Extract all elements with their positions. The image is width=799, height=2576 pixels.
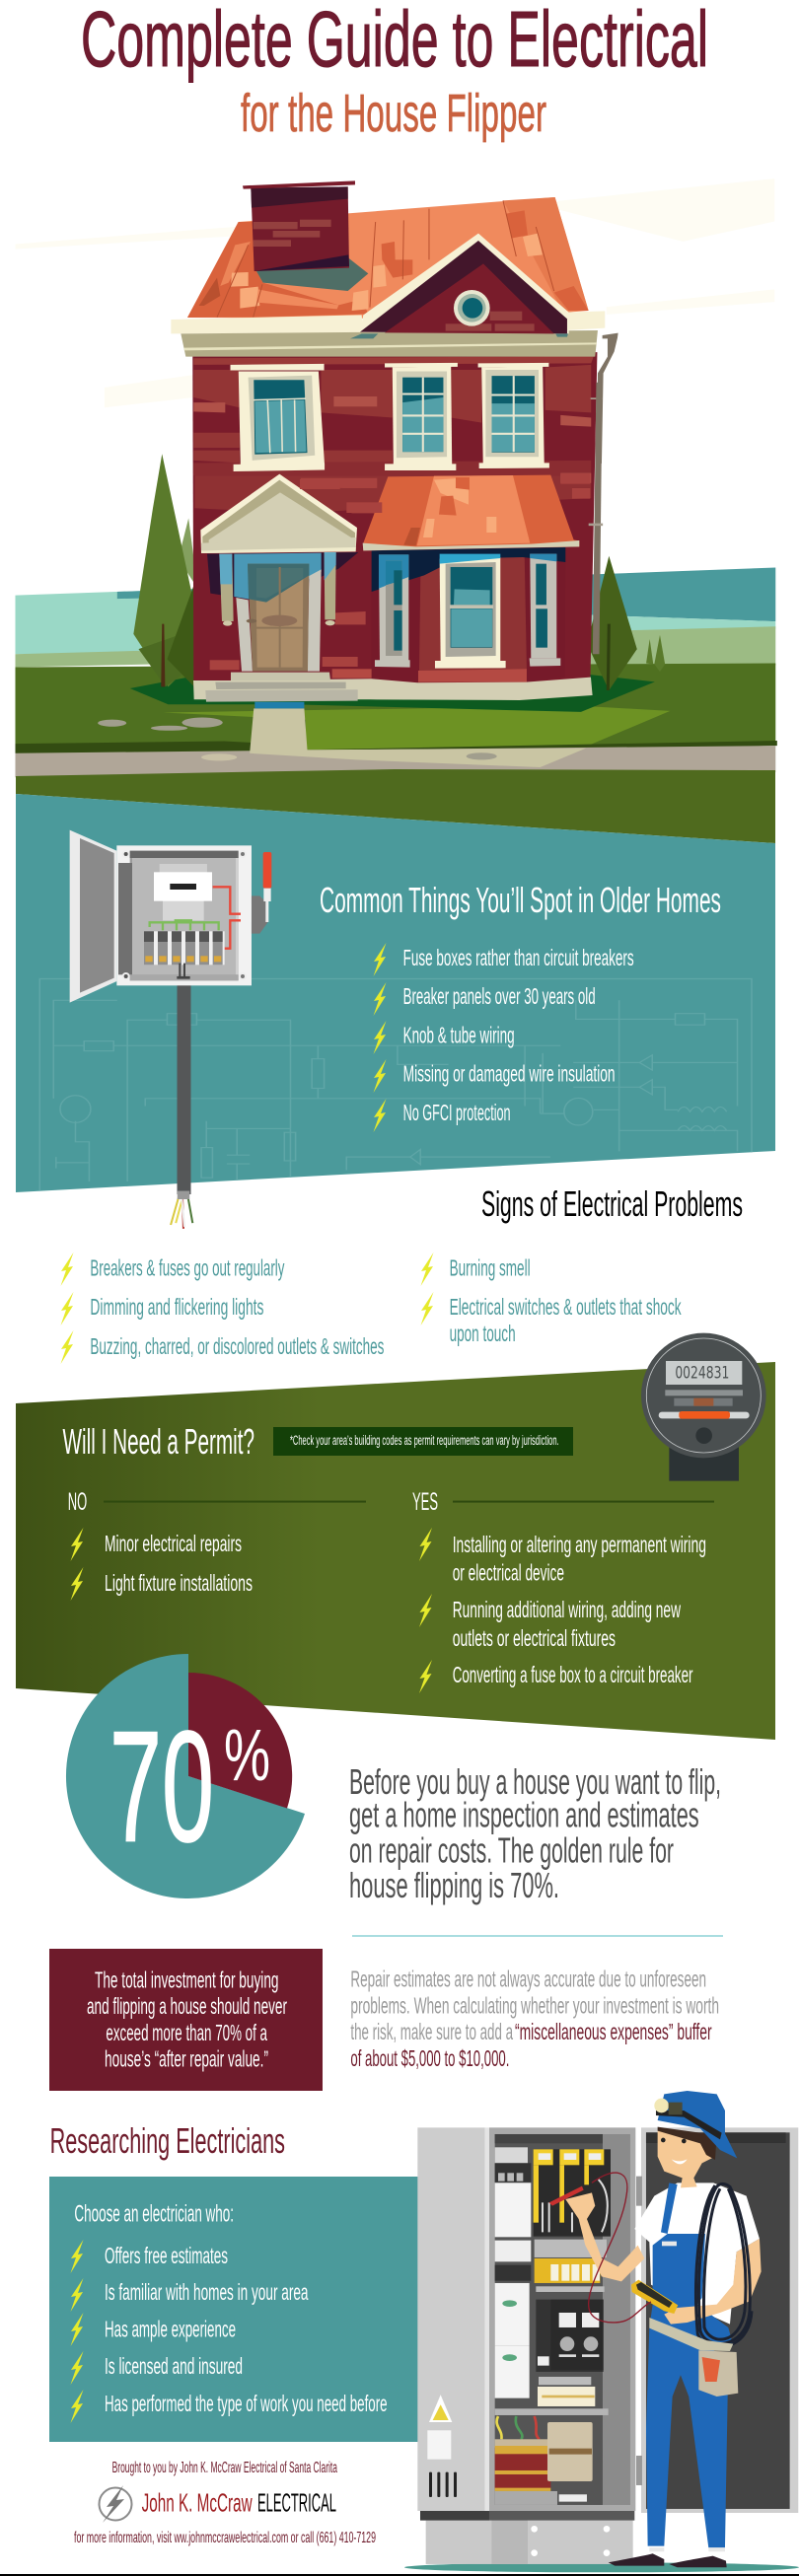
text: ELECTRICAL [257,2488,336,2518]
column: no: NO [68,1488,87,1516]
callout: total investment: exceed more than 70% of a [106,2020,267,2045]
callout: total investment: house’s “after repair value.” [105,2046,268,2072]
list: older home items: Breaker panels over 30 years old [403,983,596,1009]
note: building codes [273,1427,573,1456]
house upper windows [231,363,603,654]
panel: will I need a permit [16,1362,775,1740]
illustration: house in landscape [15,179,777,843]
right door [641,2127,798,2513]
panel: choose an electrician: Offers free estimates [105,2243,228,2268]
list: older home items: Missing or damaged wire insulation [403,1061,616,1087]
circuit diagram background [39,978,752,1204]
coil of wire [696,2183,752,2347]
pie chart: 70%: 70 [109,1698,214,1875]
list: older home items [373,943,634,1132]
foundation [193,678,593,700]
panel: choose an electrician: Choose an electrician who: [74,2201,234,2228]
text: contact info: for more information, visit ww.johnmccrawelectrical.com or call (661) 410-7129 [74,2530,376,2546]
heading: permit: Will I Need a Permit? [63,1421,254,1462]
text: repair estimates [350,1967,719,2071]
text: brought to you by: Brought to you by John K. McCraw Electrical of Santa Clarita [112,2460,337,2476]
text: repair estimates: the risk, make sure to add a [350,2019,513,2044]
column: yes [412,1488,714,1693]
column: no [68,1488,366,1601]
column: no: Minor electrical repairs [105,1531,242,1556]
list: older home items: Knob & tube wiring [403,1022,515,1047]
panel: choose an electrician: Is familiar with homes in your area [105,2279,309,2305]
text: repair estimates: of about $5,000 to $10,000. [350,2045,509,2071]
trees behind [179,519,197,589]
house upper: chimney, roof, gable [171,180,618,464]
bay [372,547,565,682]
panel: choose an electrician: Has performed the type of work you need before [105,2391,388,2416]
column: yes: outlets or electrical fixtures [453,1625,616,1651]
worker body [646,2327,728,2547]
logo: John K. McCraw Electrical [99,2485,336,2523]
note: building codes: *Check your area’s building codes as permit requirements can vary by jurisdiction. [290,1433,559,1448]
list: signs of problems: Burning smell [450,1255,531,1281]
stripped wires [171,1191,192,1229]
house lower: porch, door, bay window [193,473,593,702]
text: golden rule: house flipping is 70%. [349,1865,559,1905]
callout: total investment: and flipping a house should never [87,1993,287,2019]
icon: electric meter [641,1333,766,1481]
column: no: Light fixture installations [105,1570,253,1596]
list: older home items: No GFCI protection [403,1100,511,1125]
list: signs of problems: upon touch [450,1321,516,1346]
column: yes: or electrical device [453,1560,564,1586]
text: golden rule [349,1761,721,1905]
ground strip under road [16,769,775,843]
subtitle: for the House Flipper [241,84,546,143]
illustration: fuse box with cable [70,830,271,1229]
pie chart: 70% [66,1654,305,1898]
icon: electric meter: 0024831 [675,1363,729,1382]
list: signs of problems [61,1252,682,1364]
list: signs of problems: Buzzing, charred, or discolored outlets & switches [90,1333,384,1359]
list: signs of problems: Dimming and flickering lights [90,1294,263,1320]
walls [192,352,597,689]
panel: choose an electrician: Has ample experience [105,2317,236,2342]
illustration: electrician at cabinet [404,2091,799,2572]
heading: researching electricians: Researching Electricians [50,2120,285,2161]
panel: choose an electrician [49,2177,418,2442]
panel: choose an electrician: Is licensed and insured [105,2353,243,2379]
panel: common things in older homes [16,794,775,1204]
callout: total investment [49,1949,323,2091]
logo: John K. McCraw Electrical: John K. McCraw [142,2488,253,2518]
pie chart: 70%: % [224,1714,270,1796]
column: yes: YES [412,1488,438,1516]
list: signs of problems: Breakers & fuses go out regularly [90,1255,285,1281]
list: older home items: Fuse boxes rather than circuit breakers [403,945,634,970]
callout: total investment: The total investment for buying [95,1967,278,1992]
